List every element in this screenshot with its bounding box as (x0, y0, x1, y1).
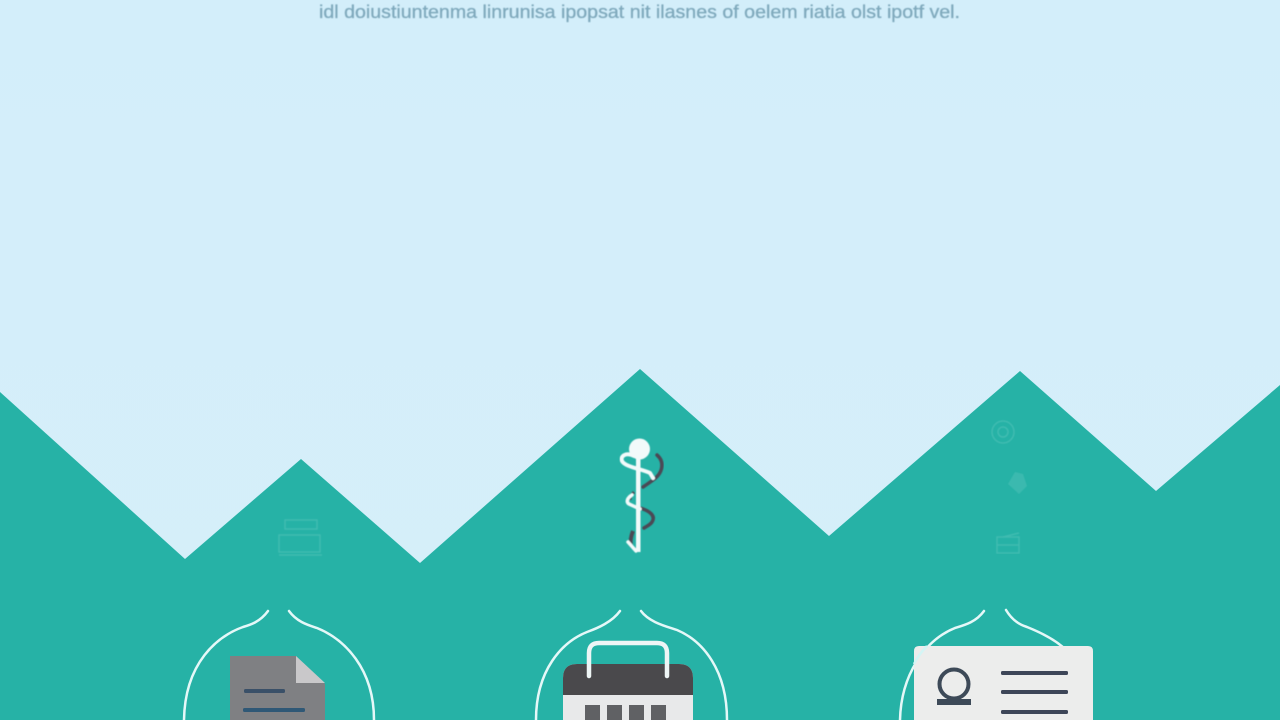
icon: faint printer (279, 520, 322, 555)
icon: calendar (563, 643, 693, 720)
icon: document (230, 656, 325, 720)
teal zigzag mountain band (0, 369, 1280, 720)
icon: faint card (997, 533, 1019, 553)
icon: faint tag (1008, 472, 1027, 494)
panel: document dome (184, 611, 374, 720)
panel: calendar dome (536, 611, 727, 720)
dome outline (900, 610, 1066, 720)
icon: medical staff with snake (622, 438, 662, 552)
dome outline (536, 611, 727, 720)
icon: faint circle badge (992, 421, 1014, 443)
icon: ID card (914, 646, 1093, 720)
panel: ID card dome (900, 610, 1093, 720)
caption text: idl doiustiuntenma linrunisa ipopsat nit ilasnes of oelem riatia olst ipotf vel. (319, 2, 960, 22)
dome outline (184, 611, 374, 720)
